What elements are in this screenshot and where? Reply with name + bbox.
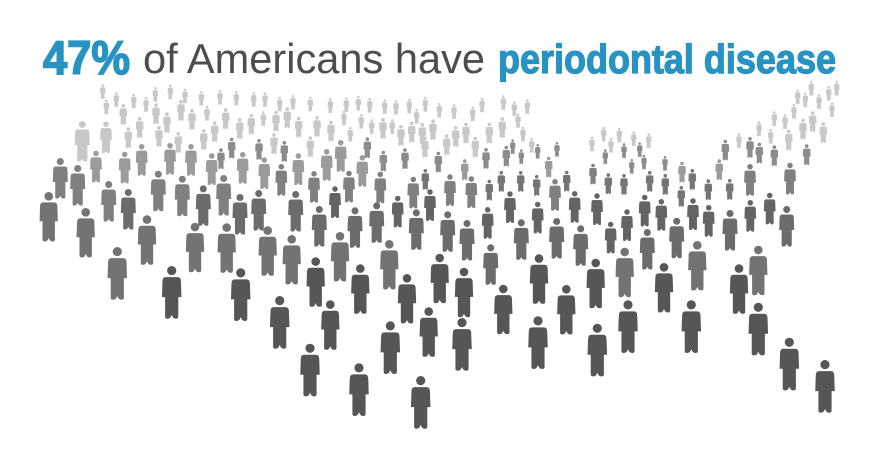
title: periodontal disease: periodontal disease: [498, 36, 836, 82]
title: 47%: 47%: [43, 31, 130, 84]
people: darker grey medium figures: [329, 186, 776, 253]
title: [43, 31, 836, 84]
people: darkest southern figures: [162, 254, 835, 429]
people: lightest northern rows: [75, 81, 839, 162]
title: of Americans have: of Americans have: [143, 35, 485, 82]
people: small grey figures: [217, 137, 811, 174]
people map of the United States: [40, 81, 839, 429]
people: mid grey figures: [53, 158, 796, 222]
people: dark grey large central rows: [121, 185, 794, 285]
people: large grey figures: [40, 192, 767, 300]
people: small dark grey figures: [421, 169, 734, 207]
people: upper middle grey rows: [90, 140, 723, 189]
